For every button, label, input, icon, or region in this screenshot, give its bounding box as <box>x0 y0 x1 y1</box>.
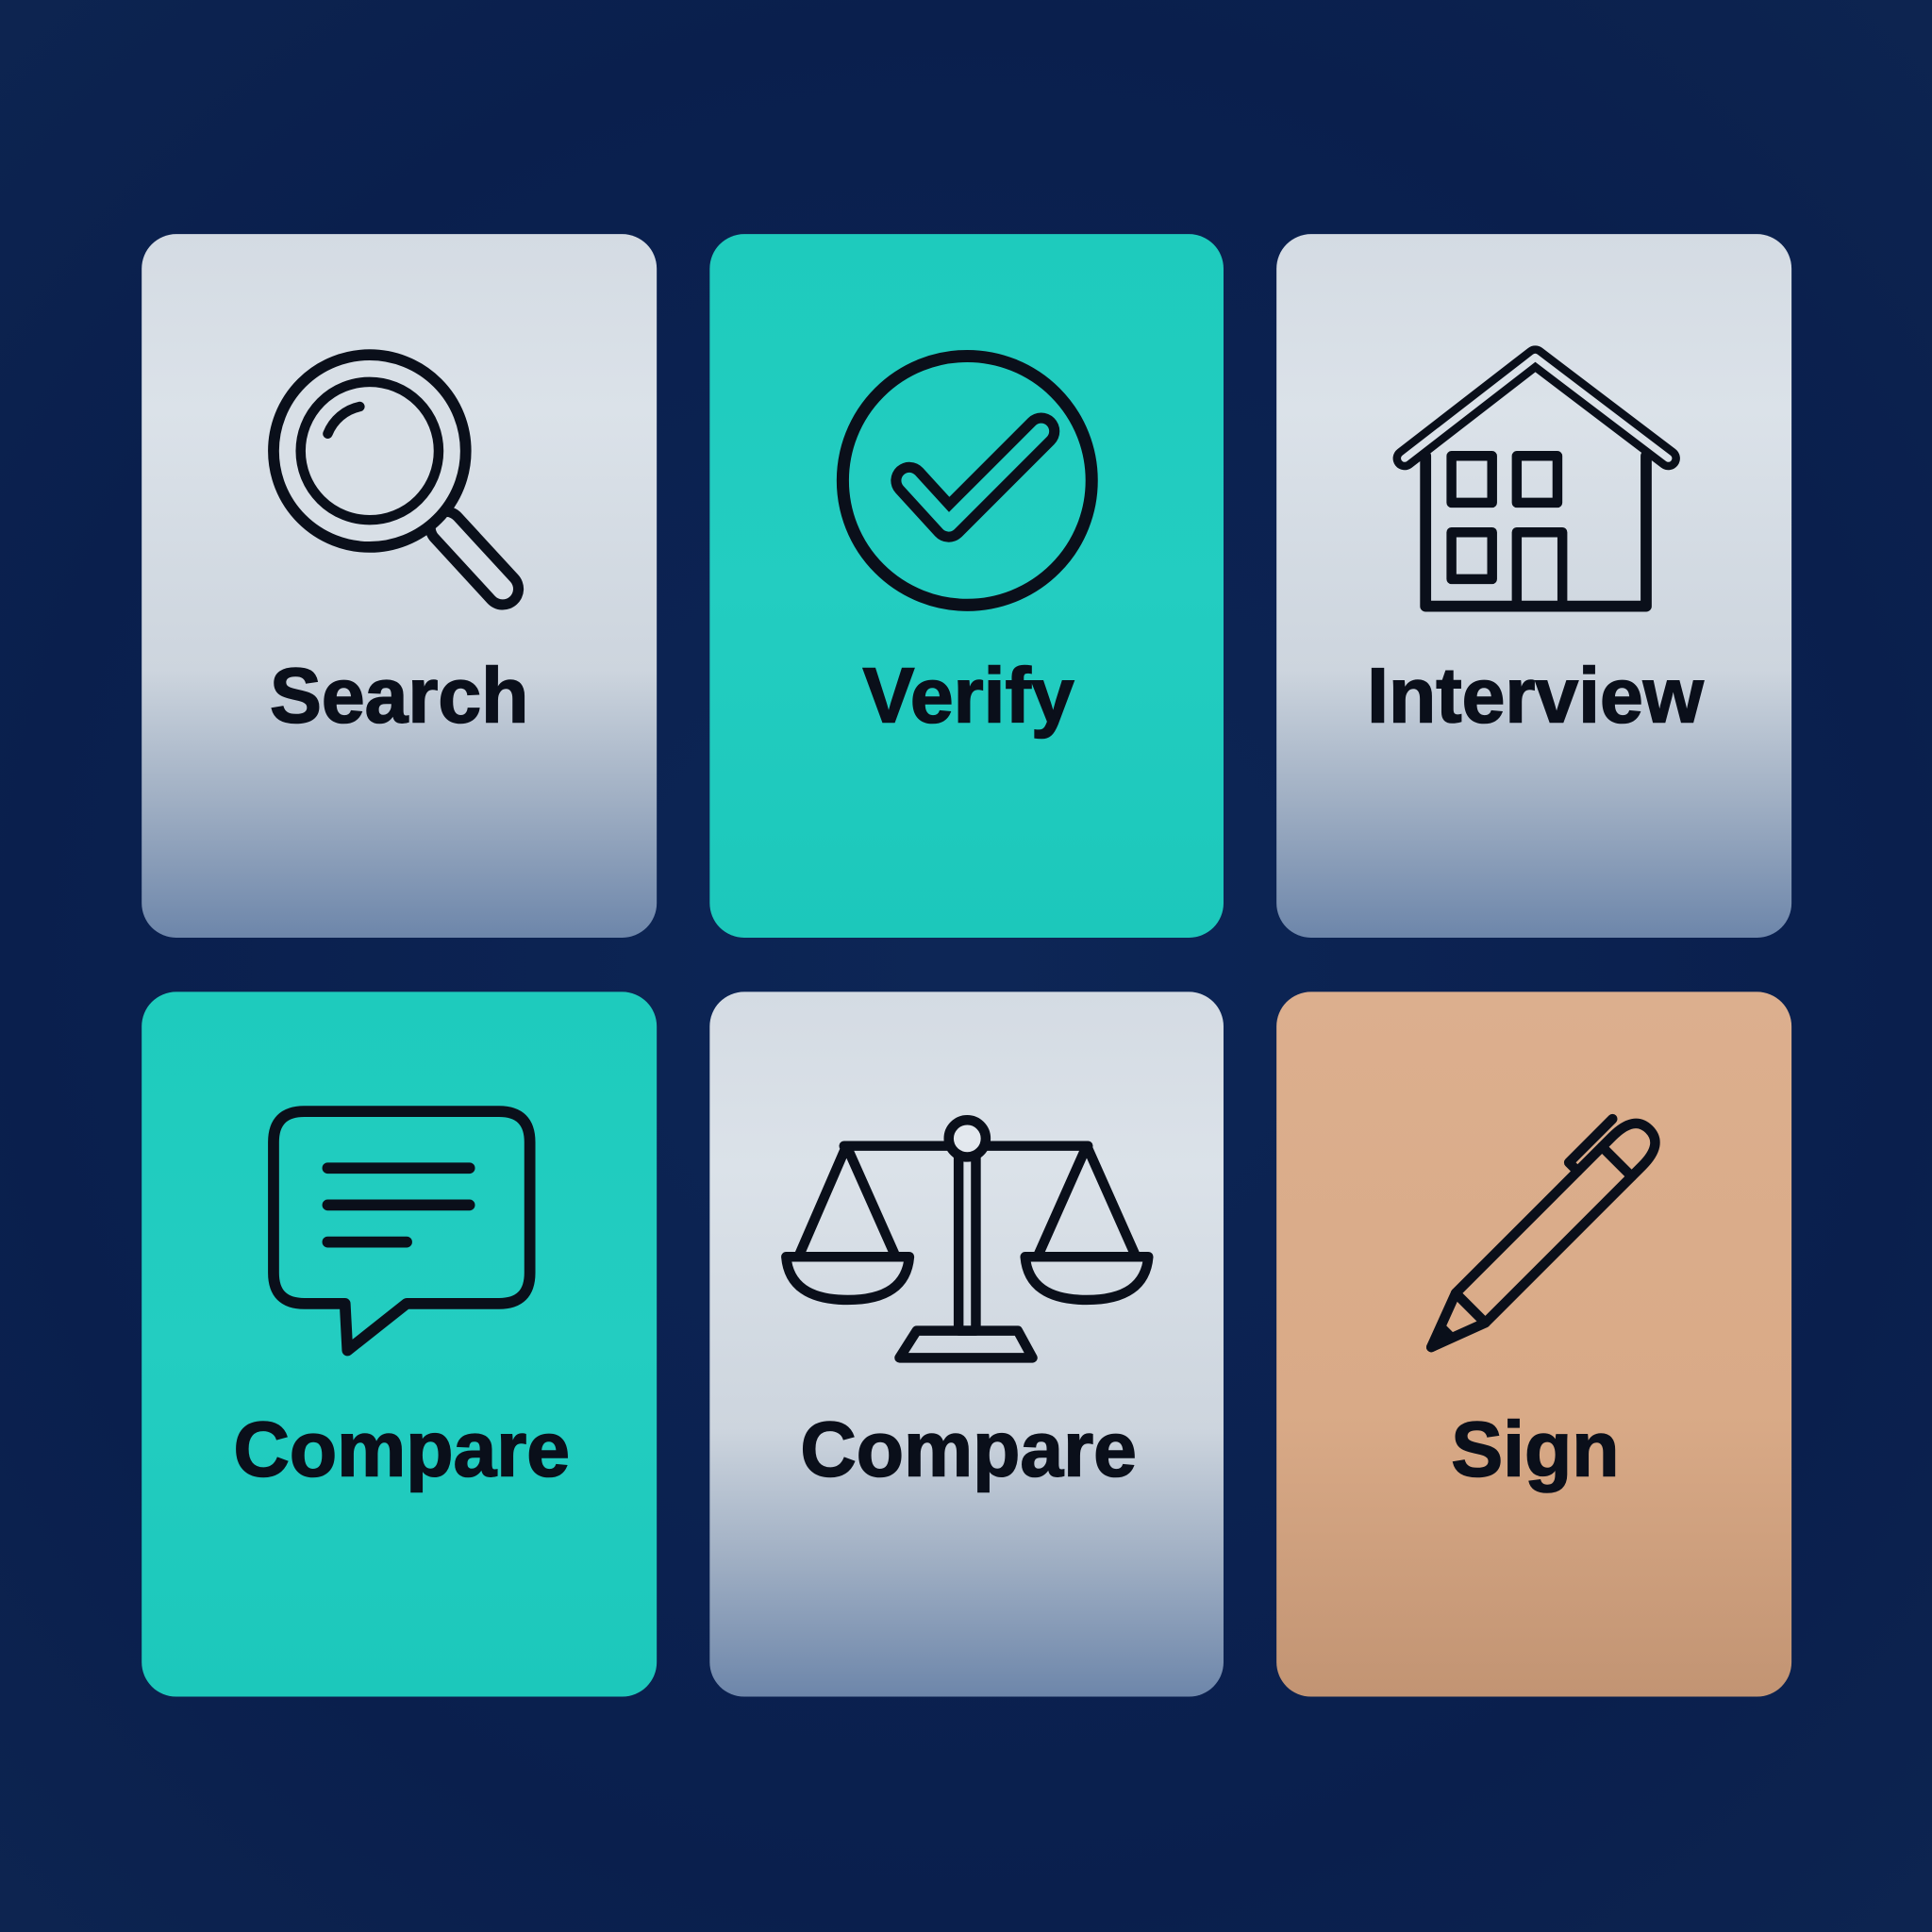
icon: house <box>1405 358 1668 607</box>
icon: check circle <box>842 356 1091 605</box>
card: Compare (scale) <box>709 991 1224 1697</box>
label: Search: Search <box>270 653 528 739</box>
icon: speech bubble <box>274 1111 530 1351</box>
card: Interview <box>1276 234 1791 938</box>
card: Sign <box>1276 991 1791 1697</box>
icon: pen <box>1407 1106 1664 1362</box>
label: Compare: Compare <box>800 1407 1137 1493</box>
label: Interview: Interview <box>1367 653 1705 739</box>
icon: magnifying glass <box>274 355 503 589</box>
label: Verify: Verify <box>863 653 1074 739</box>
card: Verify <box>709 234 1224 938</box>
label: Compare: Compare <box>233 1407 570 1493</box>
card: Compare (chat) <box>142 991 657 1697</box>
card: Search <box>142 234 657 938</box>
label: Sign: Sign <box>1451 1407 1620 1493</box>
icon: balance scale <box>786 1120 1148 1357</box>
